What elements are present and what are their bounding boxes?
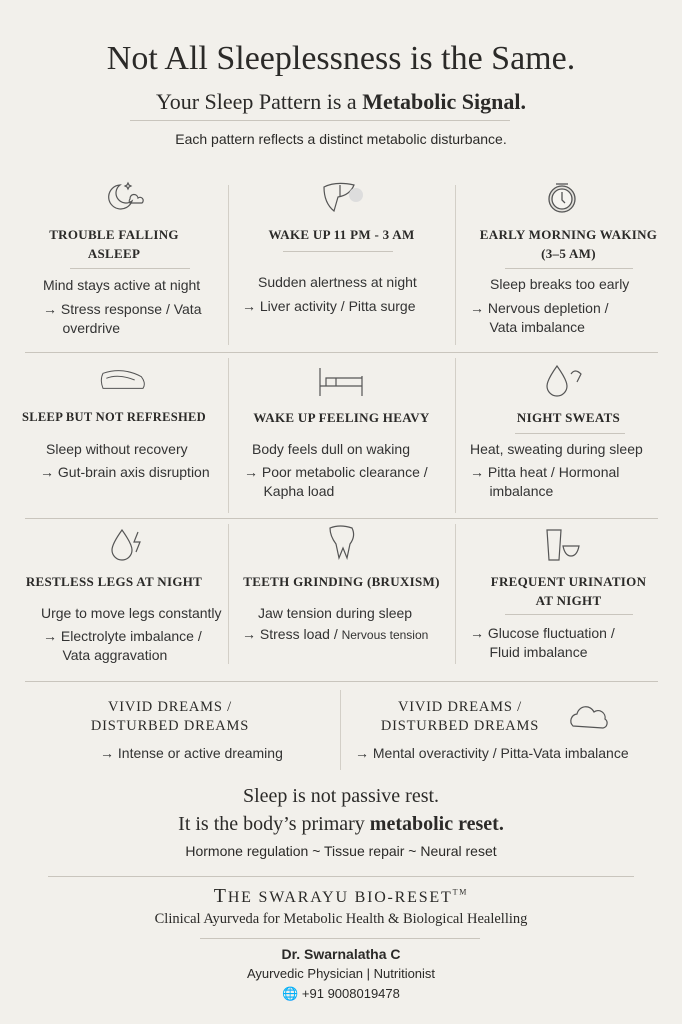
panel: sleep but not refreshed: → Gut-brain axis disruption <box>40 464 210 480</box>
panel: wake up feeling heavy: WAKE UP FEELING HEAVY <box>253 410 430 425</box>
icon: glass <box>546 529 580 561</box>
panel: wake up 11pm-3am: → Liver activity / Pitta surge <box>242 298 416 314</box>
panel: frequent urination <box>470 529 646 660</box>
panel: trouble falling asleep: Mind stays active at night <box>43 277 200 293</box>
panel: sleep but not refreshed <box>22 370 210 480</box>
panel: early morning waking: Vata imbalance <box>489 319 585 335</box>
doctor info: Dr. Swarnalatha C <box>281 946 401 962</box>
closing statement <box>178 785 504 835</box>
panel: night sweats: NIGHT SWEATS <box>517 410 620 425</box>
panel: early morning waking: EARLY MORNING WAKING <box>480 227 657 242</box>
panel: trouble falling asleep: overdrive <box>62 320 120 336</box>
closing statement: It is the body’s primary metabolic reset. <box>178 813 504 835</box>
panel: trouble falling asleep: TROUBLE FALLING <box>49 227 179 242</box>
icon: drop and lightning <box>111 529 141 561</box>
panel: early morning waking: (3–5 AM) <box>541 246 596 261</box>
panel: night sweats: imbalance <box>489 483 553 499</box>
panel: trouble falling asleep <box>43 182 202 336</box>
panel: wake up feeling heavy: → Poor metabolic clearance / <box>244 464 428 480</box>
panel: wake up 11pm-3am: WAKE UP 11 PM - 3 AM <box>268 227 415 242</box>
panel: frequent urination: Fluid imbalance <box>489 644 588 660</box>
doctor info: 🌐 +91 9008019478 <box>282 986 400 1001</box>
panel: restless legs <box>26 529 222 663</box>
panel: vivid dreams right: VIVID DREAMS / <box>398 699 522 715</box>
panel: early morning waking <box>470 183 657 335</box>
panel: wake up 11pm-3am: Sudden alertness at night <box>258 274 417 290</box>
panel: vivid dreams left: VIVID DREAMS / <box>108 699 232 715</box>
title: Not All Sleeplessness is the Same. <box>107 40 575 77</box>
panel: early morning waking: → Nervous depletion / <box>470 300 609 316</box>
panel: frequent urination: FREQUENT URINATION <box>491 574 646 589</box>
icon: pillow <box>100 370 145 389</box>
panel: sleep but not refreshed: Sleep without recovery <box>46 441 188 457</box>
closing statement: Sleep is not passive rest. <box>243 785 439 807</box>
key functions: Hormone regulation ~ Tissue repair ~ Neural reset <box>185 843 497 859</box>
icon: drop <box>546 365 582 397</box>
text: Clinical Ayurveda for Metabolic Health & Biological Healelling <box>155 911 527 927</box>
panel: night sweats <box>470 365 643 499</box>
panel: restless legs: → Electrolyte imbalance / <box>43 628 202 644</box>
panel: night sweats: → Pitta heat / Hormonal <box>470 464 619 480</box>
panel: vivid dreams left <box>91 699 283 761</box>
panel: vivid dreams right: → Mental overactivity / Pitta-Vata imbalance <box>355 745 629 761</box>
panel: wake up 11pm-3am <box>242 182 417 314</box>
panel: wake up feeling heavy: Kapha load <box>263 483 334 499</box>
panel: vivid dreams right: DISTURBED DREAMS <box>381 718 539 734</box>
icon: moon <box>108 182 144 210</box>
subtitle: Your Sleep Pattern is a Metabolic Signal. <box>156 89 526 114</box>
panel: sleep but not refreshed: SLEEP BUT NOT REFRESHED <box>22 410 206 424</box>
doctor info <box>247 946 435 1001</box>
icon: tooth <box>329 525 354 560</box>
panel: vivid dreams left: DISTURBED DREAMS <box>91 718 249 734</box>
panel: teeth grinding <box>242 525 440 642</box>
panel: frequent urination: → Glucose fluctuation / <box>470 625 615 641</box>
brand: THE SWARAYU BIO-RESETTM <box>214 885 468 907</box>
panel: night sweats: Heat, sweating during sleep <box>470 441 643 457</box>
doctor info: Ayurvedic Physician | Nutritionist <box>247 966 435 981</box>
icon: alarm clock <box>548 183 576 213</box>
panel: teeth grinding: → Stress load / Nervous tension <box>242 626 428 642</box>
panel: restless legs: Vata aggravation <box>62 647 167 663</box>
icon: liver <box>323 182 363 212</box>
panel: restless legs: Urge to move legs constantly <box>41 605 222 621</box>
panel: trouble falling asleep: ASLEEP <box>88 246 140 261</box>
panel: frequent urination: AT NIGHT <box>536 593 601 608</box>
panel: teeth grinding: TEETH GRINDING (BRUXISM) <box>243 574 440 589</box>
panel: wake up feeling heavy: Body feels dull on waking <box>252 441 410 457</box>
panel: wake up feeling heavy <box>244 368 430 499</box>
panel: restless legs: RESTLESS LEGS AT NIGHT <box>26 574 202 589</box>
panel: trouble falling asleep: → Stress response / Vata <box>43 301 201 317</box>
panel: teeth grinding: Jaw tension during sleep <box>258 605 412 621</box>
panel: vivid dreams left: → Intense or active dreaming <box>100 745 283 761</box>
icon: bed <box>319 368 363 396</box>
panel: vivid dreams right <box>355 699 629 761</box>
icon: cloud <box>570 706 608 729</box>
panel: early morning waking: Sleep breaks too early <box>490 276 629 292</box>
intro text: Each pattern reflects a distinct metabolic disturbance. <box>175 131 507 147</box>
